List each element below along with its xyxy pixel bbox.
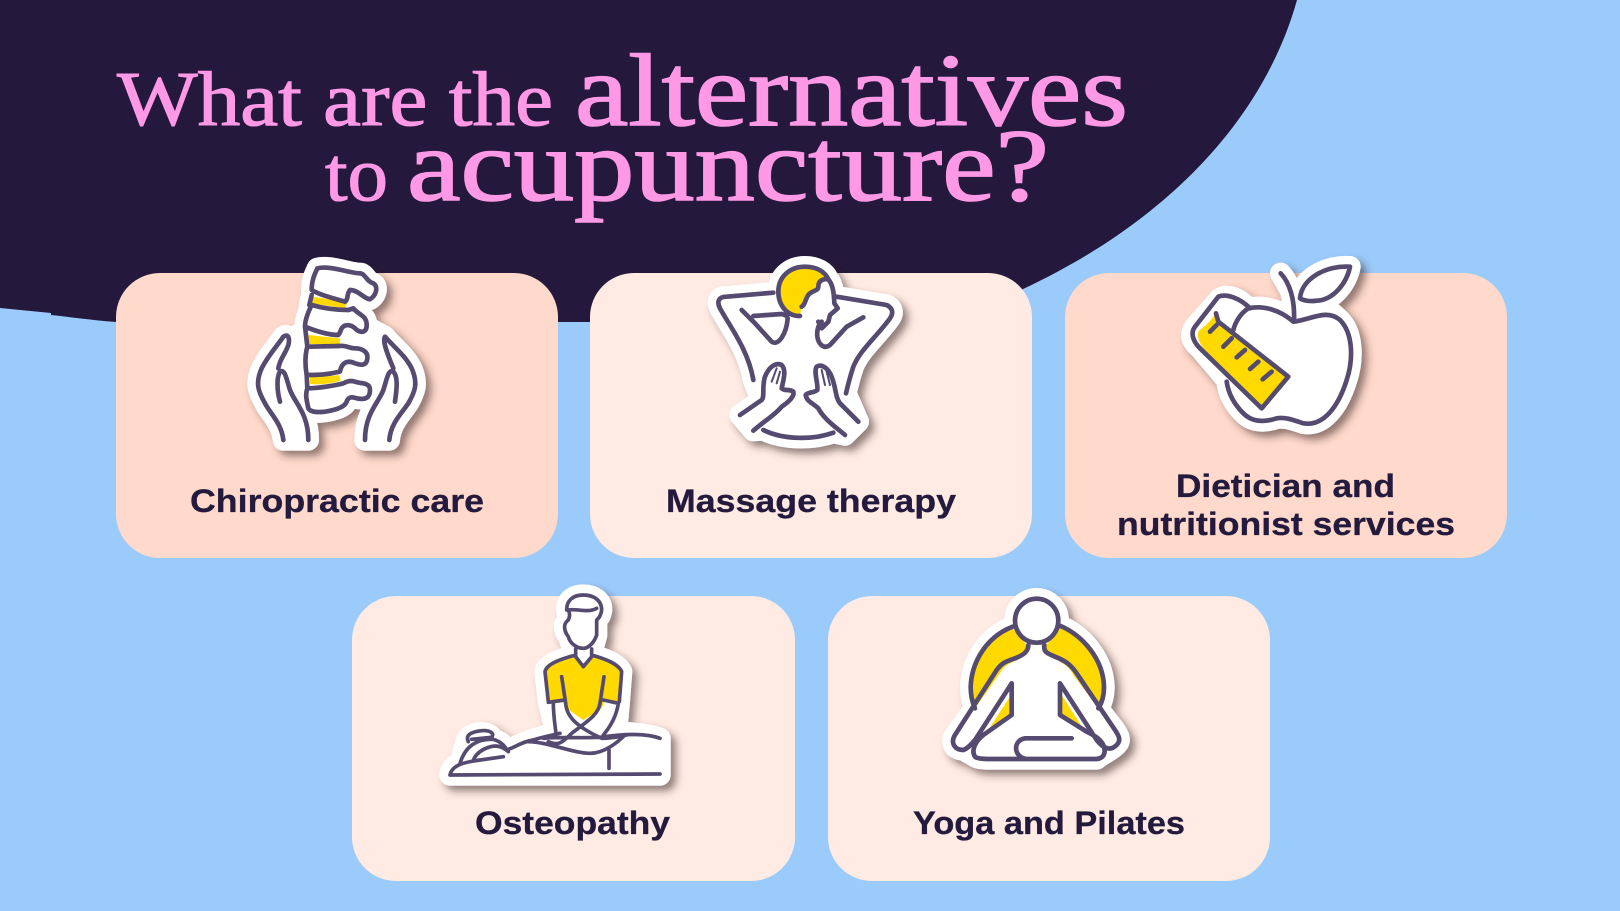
card: osteopathy [352, 596, 795, 881]
icon: back massage [718, 267, 892, 438]
dark header shape [0, 0, 1297, 322]
icon: spine held by hands [258, 268, 415, 440]
label: dietician and nutritionist services: nutritionist services [1117, 506, 1455, 542]
icon: apple with measuring tape [1192, 267, 1351, 424]
label: massage therapy: Massage therapy [666, 483, 956, 519]
title: alternatives [575, 34, 1128, 148]
label: yoga and pilates: Yoga and Pilates [913, 805, 1185, 841]
card: massage therapy [590, 273, 1032, 558]
icon: osteopath treating a patient [450, 595, 660, 775]
label: osteopathy: Osteopathy [475, 805, 670, 841]
card: dietician and nutritionist services [1065, 273, 1507, 558]
title: What are the [117, 56, 553, 142]
title: acupuncture? [407, 109, 1049, 223]
label: chiropractic care: Chiropractic care [190, 483, 484, 519]
card: chiropractic care [116, 273, 558, 558]
label: dietician and nutritionist services [1117, 468, 1455, 542]
card: yoga and pilates [828, 596, 1270, 881]
title [117, 34, 1128, 223]
title: to [325, 131, 388, 217]
label: dietician and nutritionist services: Dietician and [1176, 468, 1395, 504]
icon: meditation pose [953, 599, 1119, 759]
